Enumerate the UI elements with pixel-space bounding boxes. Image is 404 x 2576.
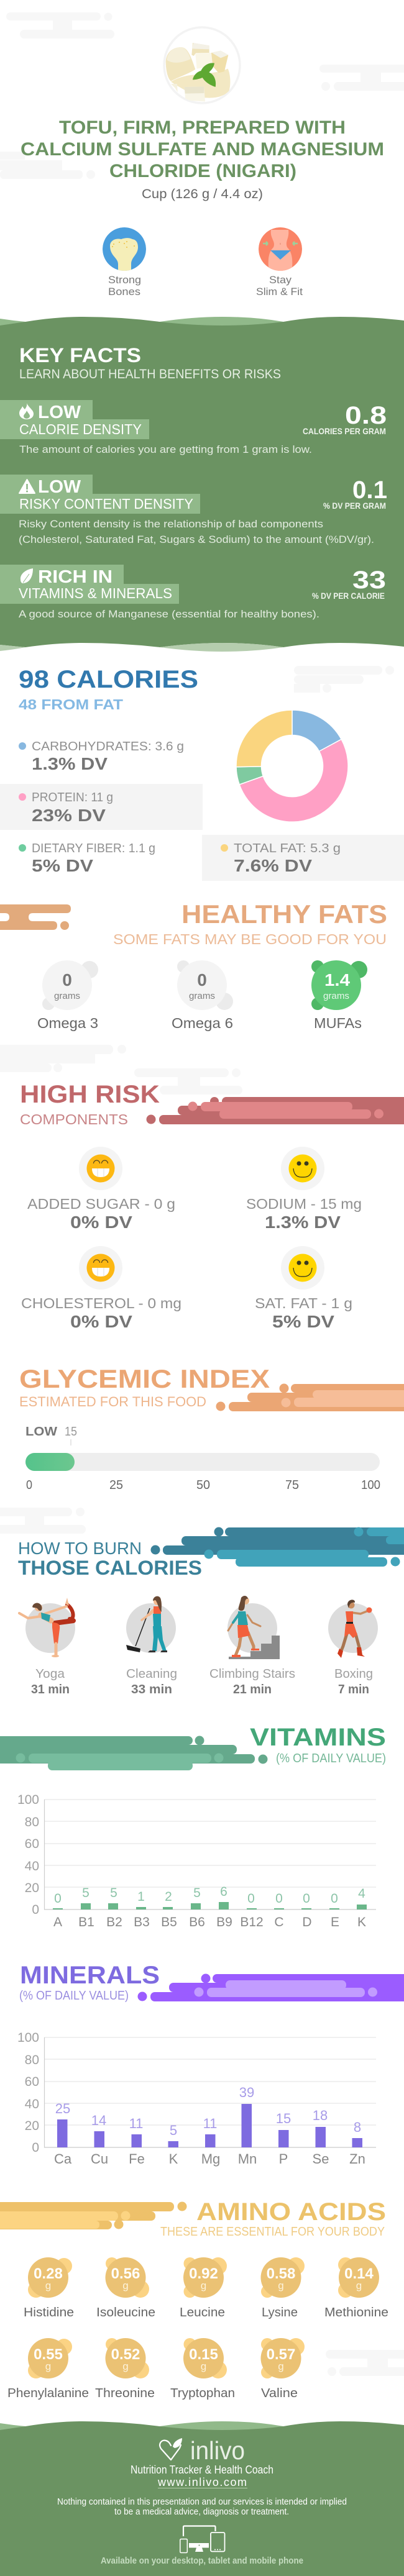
heading: key facts: KEY FACTS <box>19 344 141 366</box>
item: cholesterol: 0% DV <box>70 1312 132 1331</box>
bar chart: minerals: P <box>279 2151 288 2167</box>
description: Risky Content density is the relationship of bad components <box>19 518 323 530</box>
bar chart: vitamins: 40 <box>25 1859 39 1873</box>
amino: valine: Valine <box>261 2387 298 2400</box>
amino: tryptophan: 0.15 <box>189 2346 218 2363</box>
item: sodium <box>246 1147 362 1232</box>
gauge label: 15 <box>65 1425 77 1439</box>
amino: tryptophan: Tryptophan <box>170 2387 235 2400</box>
amino: phenylalanine: Phenylalanine <box>7 2387 89 2400</box>
title: TOFU, FIRM, PREPARED WITH <box>59 117 346 138</box>
heading: calories: 98 CALORIES <box>19 666 198 693</box>
value: 33 <box>352 567 386 594</box>
amino: tryptophan <box>170 2338 235 2400</box>
bar chart: minerals: Se <box>313 2151 329 2167</box>
heading: amino acids: AMINO ACIDS <box>196 2198 386 2226</box>
subheading: SOME FATS MAY BE GOOD FOR YOU <box>113 931 387 947</box>
bar chart: vitamins: 0 <box>275 1891 283 1906</box>
subheading: (% OF DAILY VALUE) <box>276 1752 386 1765</box>
label: 33 min <box>131 1683 172 1696</box>
benefit: strong bones <box>103 227 146 298</box>
rating: rich in: RICH IN <box>38 567 112 587</box>
amino: methionine: 0.14 <box>344 2265 374 2282</box>
amino: histidine <box>24 2257 74 2319</box>
bar chart: minerals: 5 <box>170 2123 177 2138</box>
fact: risky content density <box>0 475 387 545</box>
availability note: Available on your desktop, tablet and mobile phone <box>101 2556 303 2566</box>
label: 21 min <box>233 1683 272 1696</box>
bar chart: vitamins: 0 <box>303 1891 310 1906</box>
heading: healthy fats: HEALTHY FATS <box>181 899 387 929</box>
label: strong bones: Bones <box>108 286 140 298</box>
bar chart: vitamins: B9 <box>216 1915 232 1929</box>
bar chart: vitamins: E <box>331 1915 339 1929</box>
amino: leucine: g <box>201 2280 206 2292</box>
amino: histidine: g <box>45 2280 51 2292</box>
icon: warning <box>19 480 35 493</box>
amino: threonine: Threonine <box>95 2387 155 2400</box>
benefit: stay slim and fit <box>256 227 303 298</box>
bar chart: vitamins: K <box>357 1915 366 1929</box>
label: Boxing <box>334 1667 373 1681</box>
icon: flame <box>19 403 34 419</box>
bar chart: minerals: 15 <box>276 2111 291 2126</box>
bar chart: minerals: 8 <box>354 2119 361 2135</box>
item: added sugar: ADDED SUGAR - 0 g <box>27 1196 175 1212</box>
value: 0.8 <box>345 402 387 429</box>
subheading: LEARN ABOUT HEALTH BENEFITS OR RISKS <box>19 367 281 381</box>
amino: isoleucine: 0.56 <box>111 2265 140 2282</box>
icon: devices <box>180 2526 225 2553</box>
item: saturated fat: 5% DV <box>272 1312 334 1331</box>
amino: isoleucine: Isoleucine <box>96 2306 155 2319</box>
bar chart: vitamins: 0 <box>32 1903 39 1917</box>
stat: mufas: grams <box>323 991 349 1001</box>
heading: vitamins: VITAMINS <box>250 1724 386 1751</box>
icon: leaf <box>21 568 33 583</box>
label: 7 min <box>338 1683 369 1696</box>
item: sodium: 1.3% DV <box>265 1213 341 1232</box>
heading: glycemic index: GLYCEMIC INDEX <box>19 1364 270 1393</box>
legend: total fat: TOTAL FAT: 5.3 g <box>234 842 341 855</box>
food photo: tofu <box>164 27 240 103</box>
bar chart: minerals: 11 <box>203 2116 217 2131</box>
header decoration <box>138 1974 404 2001</box>
bar chart: minerals: 20 <box>25 2119 39 2133</box>
label: RISKY CONTENT DENSITY <box>19 496 193 512</box>
disclaimer: to be a medical advice, diagnosis or treatment. <box>114 2506 289 2517</box>
amino: phenylalanine: g <box>45 2360 51 2372</box>
bar chart: minerals: Ca <box>54 2151 72 2167</box>
bar chart: vitamins: 80 <box>25 1815 39 1829</box>
amino: lysine: Lysine <box>262 2306 298 2319</box>
bar chart: vitamins: B2 <box>106 1915 122 1929</box>
header decoration <box>0 2201 186 2229</box>
bar chart: minerals: 100 <box>17 2031 39 2045</box>
bar chart: vitamins: 5 <box>193 1886 201 1900</box>
bar chart: minerals: K <box>169 2151 178 2167</box>
item: saturated fat <box>255 1246 352 1331</box>
icon: slim waist <box>259 227 302 273</box>
serving size: Cup (126 g / 4.4 oz) <box>142 187 263 201</box>
bar chart: minerals: 40 <box>25 2097 39 2111</box>
amino: leucine: Leucine <box>180 2306 225 2319</box>
bar chart: vitamins: 2 <box>165 1890 172 1904</box>
amino: lysine <box>261 2257 305 2319</box>
header decoration <box>0 1736 267 1770</box>
amino: histidine: 0.28 <box>34 2265 63 2282</box>
panel: footer <box>0 2421 404 2576</box>
stat: mufas <box>311 960 367 1031</box>
bar chart: minerals: Zn <box>349 2151 365 2167</box>
gauge scale: 0 <box>26 1478 32 1492</box>
bar chart: vitamins: 5 <box>82 1886 90 1900</box>
panel: calories <box>0 666 404 881</box>
activity: climbing stairs <box>209 1596 295 1696</box>
label <box>126 1667 177 1696</box>
panel: vitamins <box>0 1724 386 1929</box>
stat: omega 3: 0 <box>62 970 72 990</box>
panel: how to burn those calories <box>18 1527 404 1696</box>
legend: dietary fiber: 5% DV <box>32 856 93 875</box>
stat: omega 6: grams <box>189 991 215 1001</box>
label: stay slim and fit: Stay <box>269 274 292 286</box>
item: cholesterol: CHOLESTEROL - 0 mg <box>21 1295 181 1311</box>
stat: omega 6: 0 <box>197 970 207 990</box>
description: The amount of calories you are getting from 1 gram is low. <box>19 444 312 455</box>
item: cholesterol <box>21 1246 181 1331</box>
bar chart: minerals: 25 <box>55 2101 70 2116</box>
bar chart: vitamins: 5 <box>110 1886 117 1900</box>
stat: omega 3: Omega 3 <box>37 1015 98 1031</box>
legend: total fat: 7.6% DV <box>234 856 312 875</box>
amino: lysine: 0.58 <box>267 2265 295 2282</box>
subheading: (% OF DAILY VALUE) <box>19 1989 129 2003</box>
icon: bone <box>103 227 146 273</box>
item: sodium: SODIUM - 15 mg <box>246 1196 362 1212</box>
disclaimer: Nothing contained in this presentation and our services is intended or implied <box>57 2496 347 2507</box>
stat: omega 6: Omega 6 <box>172 1015 233 1031</box>
legend: carbohydrates <box>19 740 184 773</box>
panel: minerals <box>17 1962 404 2167</box>
gauge label <box>25 1425 77 1439</box>
bar chart: vitamins: 20 <box>25 1881 39 1895</box>
amino: leucine: 0.92 <box>189 2265 218 2282</box>
item: added sugar: 0% DV <box>70 1213 132 1232</box>
legend: protein <box>19 791 113 825</box>
label <box>31 1667 70 1696</box>
subheading: components: COMPONENTS <box>20 1111 128 1127</box>
logo wordmark: inlivo <box>190 2436 245 2465</box>
bar chart: minerals: 39 <box>239 2085 254 2100</box>
bar chart: vitamins: 60 <box>25 1837 39 1851</box>
title: CHLORIDE (NIGARI) <box>109 161 296 181</box>
amino: methionine: g <box>356 2280 362 2292</box>
legend: total fat <box>221 842 341 875</box>
title: CALCIUM SULFATE AND MAGNESIUM <box>21 139 384 160</box>
amino: isoleucine: g <box>122 2280 129 2292</box>
panel: high risk components <box>20 1081 404 1331</box>
fact: rich in vitamins and minerals <box>0 565 386 620</box>
disclaimer <box>57 2496 347 2517</box>
unit: % DV PER GRAM <box>323 501 386 511</box>
gauge scale: 75 <box>285 1478 299 1492</box>
panel: amino acids <box>0 2198 388 2400</box>
subheading: THESE ARE ESSENTIAL FOR YOUR BODY <box>160 2225 385 2239</box>
amino: tryptophan: g <box>201 2360 206 2372</box>
bar chart: vitamins: A <box>53 1915 62 1929</box>
heading line one: HOW TO BURN <box>18 1539 142 1558</box>
bar chart: minerals: 0 <box>32 2141 39 2155</box>
legend: protein: 23% DV <box>32 806 106 825</box>
bar chart: minerals <box>17 2031 376 2167</box>
logo: heart and leaf <box>160 2438 182 2460</box>
bar chart: vitamins: 6 <box>220 1885 227 1899</box>
website link: www.inlivo.com <box>157 2476 247 2488</box>
value: 0.1 <box>352 476 387 504</box>
amino: valine: 0.57 <box>267 2346 295 2363</box>
stat: omega 3 <box>37 960 98 1031</box>
bar chart: minerals: Mg <box>201 2151 220 2167</box>
panel: key facts <box>0 317 404 652</box>
amino: threonine: g <box>122 2360 129 2372</box>
amino: isoleucine <box>96 2257 155 2319</box>
stat: omega 3: grams <box>54 991 80 1001</box>
panel: healthy fats <box>0 899 387 1031</box>
label <box>334 1667 373 1696</box>
legend: dietary fiber <box>19 842 155 875</box>
rating: low: LOW <box>38 477 81 497</box>
bar chart: minerals: 60 <box>25 2075 39 2089</box>
subheading: from fat: 48 FROM FAT <box>19 696 123 712</box>
bar chart: vitamins <box>17 1793 376 1929</box>
amino: threonine <box>95 2338 155 2400</box>
label: stay slim and fit <box>256 274 303 298</box>
label: Yoga <box>35 1667 65 1681</box>
bar chart: vitamins: 0 <box>54 1891 62 1906</box>
legend: dietary fiber: DIETARY FIBER: 1.1 g <box>32 842 155 855</box>
fact: calorie density <box>0 400 387 455</box>
subheading: ESTIMATED FOR THIS FOOD <box>19 1394 206 1409</box>
stat: mufas: 1.4 <box>324 970 350 990</box>
amino: leucine <box>180 2257 227 2319</box>
amino: phenylalanine <box>7 2338 89 2400</box>
amino: phenylalanine: 0.55 <box>34 2346 63 2363</box>
item: added sugar <box>27 1147 175 1232</box>
gauge scale <box>26 1478 380 1492</box>
activity: cleaning <box>126 1596 177 1696</box>
legend row backgrounds <box>0 784 404 881</box>
bar chart: minerals: 11 <box>129 2116 143 2131</box>
label: stay slim and fit: Slim & Fit <box>256 286 303 298</box>
title <box>21 117 384 181</box>
bar chart: vitamins: 0 <box>331 1891 338 1906</box>
label: Climbing Stairs <box>209 1667 295 1681</box>
item: saturated fat: SAT. FAT - 1 g <box>255 1295 352 1311</box>
bar chart: vitamins: 100 <box>17 1793 39 1807</box>
legend: carbohydrates: CARBOHYDRATES: 3.6 g <box>32 740 184 753</box>
bar chart: vitamins: 0 <box>247 1891 255 1906</box>
tagline: Nutrition Tracker & Health Coach <box>131 2464 273 2476</box>
label: VITAMINS & MINERALS <box>19 585 172 601</box>
bar chart: minerals: 18 <box>313 2108 328 2123</box>
unit: CALORIES PER GRAM <box>303 426 386 436</box>
bar chart: minerals: Cu <box>91 2151 108 2167</box>
bar chart: minerals: 14 <box>91 2113 106 2128</box>
amino: methionine: Methionine <box>324 2306 388 2319</box>
description <box>19 518 374 545</box>
legend: protein: PROTEIN: 11 g <box>32 791 113 804</box>
amino: lysine: g <box>278 2280 284 2292</box>
bar chart: minerals: Fe <box>129 2151 145 2167</box>
legend: carbohydrates: 1.3% DV <box>32 754 108 773</box>
heading: minerals: MINERALS <box>20 1962 160 1989</box>
description: A good source of Manganese (essential for healthy bones). <box>19 608 319 620</box>
bar chart: vitamins: 1 <box>137 1890 145 1904</box>
donut chart <box>236 710 348 822</box>
bar chart: vitamins: B1 <box>78 1915 94 1929</box>
gauge label: LOW <box>25 1425 57 1439</box>
activity: boxing <box>328 1600 378 1696</box>
bar chart: vitamins: B5 <box>161 1915 177 1929</box>
gauge scale: 25 <box>109 1478 123 1492</box>
header decoration <box>147 1097 404 1124</box>
stat: mufas: MUFAs <box>314 1015 362 1031</box>
amino: threonine: 0.52 <box>111 2346 140 2363</box>
stat: omega 6 <box>172 960 233 1031</box>
bar chart: vitamins: 4 <box>358 1886 365 1901</box>
gauge scale: 50 <box>196 1478 210 1492</box>
label: 31 min <box>31 1683 70 1696</box>
amino: histidine: Histidine <box>24 2306 74 2319</box>
bar chart: vitamins: B3 <box>134 1915 150 1929</box>
heading: high risk: HIGH RISK <box>20 1081 160 1108</box>
panel: glycemic index <box>19 1364 404 1492</box>
header decoration <box>150 1527 404 1567</box>
rating: low: LOW <box>38 403 81 422</box>
bar chart: vitamins: D <box>302 1915 312 1929</box>
label: strong bones: Strong <box>108 274 141 286</box>
unit: % DV PER CALORIE <box>312 591 385 601</box>
bar chart: vitamins: B6 <box>189 1915 205 1929</box>
bar chart: minerals: 80 <box>25 2053 39 2067</box>
label <box>209 1667 295 1696</box>
gauge bar <box>25 1453 380 1471</box>
gauge scale: 100 <box>361 1478 380 1492</box>
activity: yoga <box>19 1598 75 1696</box>
amino: valine <box>261 2338 305 2400</box>
label: CALORIE DENSITY <box>19 421 142 437</box>
bar chart: vitamins: B12 <box>240 1915 264 1929</box>
amino: valine: g <box>278 2360 284 2372</box>
header decoration <box>216 1384 404 1411</box>
label: strong bones <box>108 274 141 298</box>
description: (Cholesterol, Saturated Fat, Sugars & Sodium) to the amount (%DV/gr). <box>19 534 374 545</box>
bar chart: vitamins: C <box>274 1915 284 1929</box>
label: Cleaning <box>126 1667 177 1681</box>
bar chart: minerals: Mn <box>238 2151 257 2167</box>
amino: methionine <box>324 2257 388 2319</box>
heading line two: THOSE CALORIES <box>18 1557 202 1579</box>
